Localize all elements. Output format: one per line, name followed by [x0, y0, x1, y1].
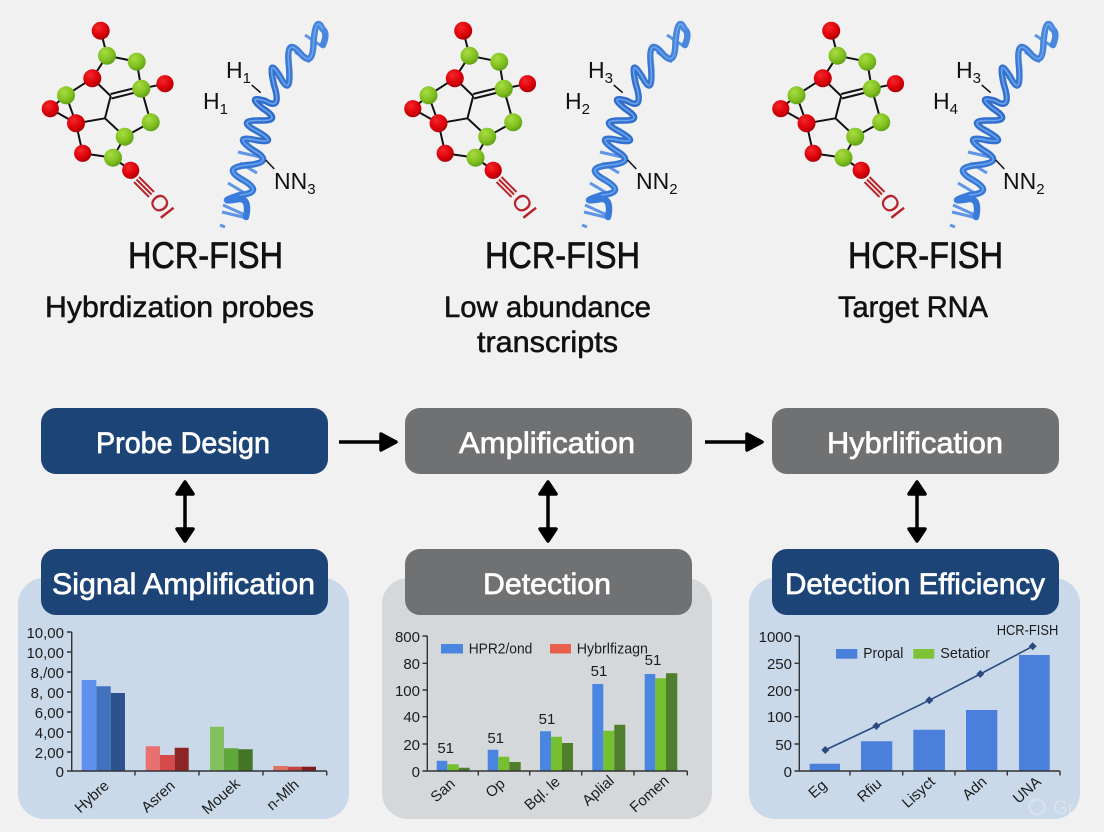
heading column 2: HCR-FISH	[485, 235, 640, 276]
panel: detection efficiency chart	[749, 578, 1080, 819]
box: Detection	[405, 549, 692, 615]
molecule column 1	[42, 22, 179, 223]
helix column 3: 4	[950, 101, 958, 118]
arrow: design to amplification	[339, 434, 396, 450]
bar chart: signal amplification: Asren	[138, 777, 179, 816]
bar chart: detection: 0	[412, 764, 420, 781]
bar chart: detection: San	[427, 775, 459, 806]
combo chart: detection efficiency: 250	[767, 656, 792, 673]
box: Signal Amplification: Signal Amplification	[52, 568, 315, 601]
helix column 3: H	[933, 88, 950, 114]
combo chart: detection efficiency: Rfiu	[854, 775, 885, 806]
bar chart: detection	[395, 629, 687, 816]
subtitle column 2: Low abundance	[444, 291, 651, 324]
helix column 2: H	[565, 88, 582, 114]
box: Hybrlification	[772, 408, 1059, 474]
bar chart: detection: Fomen	[627, 772, 673, 816]
bar chart: detection: 51	[487, 730, 504, 747]
heading column 1: HCR-FISH	[128, 235, 283, 276]
bar chart: signal amplification: n-Mlh	[263, 776, 303, 814]
watermark	[1030, 798, 1075, 819]
helix column 3: 3	[973, 70, 981, 87]
subtitle column 1: Hybrdization probes	[45, 291, 314, 324]
helix column 1: H	[203, 88, 220, 114]
double arrow column 3	[909, 482, 925, 541]
subtitle column 2	[444, 291, 651, 359]
double arrow column 2	[540, 482, 556, 541]
watermark: Gr	[1053, 798, 1075, 819]
helix column 1	[203, 24, 325, 227]
helix column 2: 2	[669, 181, 678, 198]
subtitle column 2: transcripts	[477, 326, 618, 359]
combo chart: detection efficiency: 0	[784, 764, 792, 781]
box: Detection Efficiency	[772, 549, 1059, 615]
panel: detection chart	[382, 578, 712, 819]
bar chart: detection: Aplial	[579, 772, 618, 810]
legend: Setatior	[940, 645, 990, 662]
legend: HPR2/ond	[469, 640, 532, 658]
box: Probe Design	[41, 408, 328, 474]
heading column 3: HCR-FISH	[848, 235, 1003, 276]
helix column 1: NN	[274, 168, 307, 194]
subtitle column 3: Target RNA	[838, 291, 988, 324]
legend	[441, 640, 648, 658]
molecule column 1: OI	[144, 188, 179, 223]
bar chart: detection: 800	[395, 629, 420, 646]
helix column 1: 3	[307, 181, 316, 198]
bar chart: signal amplification: 2,00	[35, 745, 64, 762]
combo chart: detection efficiency: Lisyct	[899, 773, 939, 812]
bar chart: detection: 51	[645, 652, 661, 669]
bar chart: signal amplification: Mouek	[199, 775, 244, 818]
combo chart: detection efficiency: HCR-FISH	[997, 622, 1058, 639]
bar chart: detection: 51	[539, 711, 555, 728]
molecule column 2	[404, 22, 542, 223]
helix column 3	[933, 24, 1055, 227]
helix column 3: NN	[1003, 168, 1036, 194]
bar chart: signal amplification: 10,00	[26, 625, 64, 642]
helix column 1: H	[226, 57, 243, 83]
combo chart: detection efficiency: 50	[775, 737, 792, 754]
combo chart: detection efficiency	[759, 622, 1060, 812]
arrow: amplification to hybridization	[705, 434, 762, 450]
bar chart: signal amplification	[26, 625, 327, 818]
bar chart: signal amplification: 10,00	[26, 645, 64, 662]
box: Amplification	[405, 408, 692, 474]
molecule column 3	[772, 22, 910, 223]
combo chart: detection efficiency: UNA	[1010, 773, 1045, 807]
bar chart: detection: 40	[403, 709, 420, 726]
helix column 2: H	[588, 57, 605, 83]
bar chart: signal amplification: 8,/00	[31, 665, 64, 682]
box: Detection: Detection	[483, 568, 611, 601]
bar chart: signal amplification: 4,00	[35, 725, 64, 742]
combo chart: detection efficiency: Adn	[959, 773, 990, 804]
trend line	[821, 642, 1037, 754]
bar chart: signal amplification: Hybre	[72, 777, 113, 817]
box: Amplification: Amplification	[459, 427, 635, 460]
legend: Hybrlfizagn	[577, 640, 648, 658]
bar chart: detection: 51	[437, 740, 454, 757]
combo chart: detection efficiency: 100	[767, 709, 792, 726]
combo chart: detection efficiency: 1000	[759, 629, 792, 646]
molecule column 2: OI	[507, 188, 542, 223]
bar chart: detection: 100	[395, 683, 420, 700]
legend	[836, 645, 990, 662]
helix column 1: 1	[243, 70, 251, 87]
bar chart: signal amplification: 6,00	[35, 705, 64, 722]
box: Signal Amplification	[41, 549, 328, 615]
bar chart: signal amplification: 8, 00	[31, 685, 64, 702]
bar chart: detection: 20	[403, 737, 420, 754]
bar chart: detection: Bql. le	[521, 773, 564, 814]
combo chart: detection efficiency: Eg	[805, 777, 830, 802]
bar chart: detection: 51	[591, 663, 607, 680]
box: Detection Efficiency: Detection Efficiency	[785, 568, 1045, 601]
helix column 3: H	[956, 57, 973, 83]
combo chart: detection efficiency: 200	[767, 683, 792, 700]
molecule column 3: OI	[875, 188, 910, 223]
box: Probe Design: Probe Design	[96, 427, 270, 460]
helix column 3: 2	[1036, 181, 1045, 198]
bar chart: signal amplification: 0	[56, 764, 64, 781]
helix column 2	[565, 24, 687, 227]
bar chart: detection: 80	[403, 656, 420, 673]
helix column 1: 1	[220, 101, 228, 118]
legend: Propal	[863, 645, 903, 662]
helix column 2: 3	[605, 70, 613, 87]
box: Hybrlification: Hybrlification	[827, 427, 1003, 460]
bar chart: detection: Op	[482, 775, 509, 801]
helix column 2: NN	[636, 168, 669, 194]
helix column 2: 2	[582, 101, 590, 118]
panel: signal amplification chart	[18, 578, 349, 819]
double arrow column 1	[177, 482, 193, 541]
